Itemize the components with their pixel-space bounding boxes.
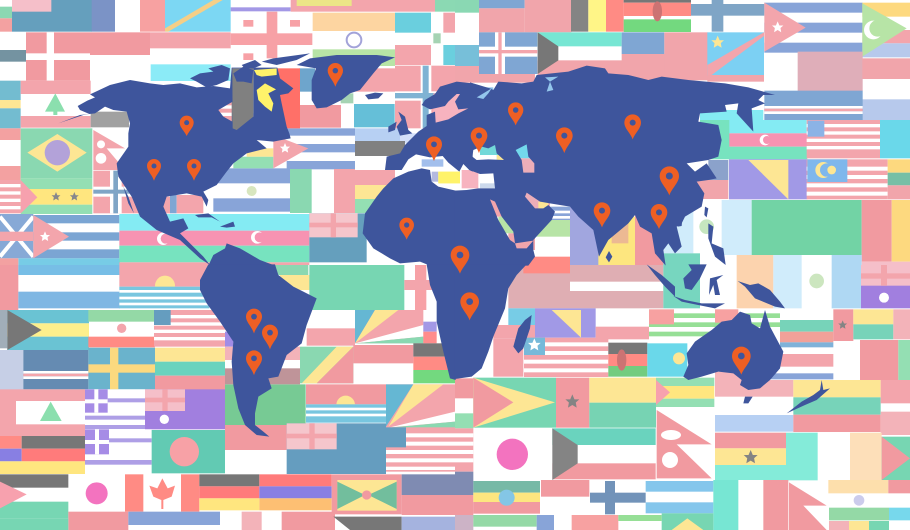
flags: Mediterranean and Baltic backdrop	[380, 93, 497, 193]
pin: Southeast Asia	[651, 204, 667, 229]
map: South America top	[208, 243, 275, 266]
flags: lower right area	[455, 265, 910, 530]
flags: upper left area	[0, 0, 455, 128]
flag: Brazil	[21, 128, 92, 178]
pin: Ukraine	[471, 127, 487, 153]
pin: China	[660, 166, 679, 195]
map: Tasmania	[743, 397, 753, 403]
map: Greenland	[297, 55, 395, 108]
map: New Zealand	[787, 380, 830, 413]
pin: Russia west	[508, 102, 523, 125]
pin: eastern USA	[187, 159, 201, 181]
map: Iceland	[365, 93, 383, 99]
pin: Australia	[732, 347, 751, 375]
world map	[58, 53, 830, 437]
flag: Sao Tome stripes	[0, 178, 92, 214]
map: Europe	[385, 82, 473, 172]
map: Australia	[683, 310, 783, 390]
pin: Argentina	[246, 350, 262, 375]
map: southern Africa east	[454, 264, 527, 379]
pin: Central Africa	[451, 246, 469, 274]
map: Asian islands	[606, 207, 726, 265]
flags: saturated patches seen through the map	[232, 68, 460, 183]
flag: Cuba	[273, 128, 355, 169]
flag: New Zealand	[309, 213, 367, 262]
flag: Azerbaijan	[119, 214, 309, 265]
pin: Brazil	[262, 325, 278, 349]
map: Madagascar	[513, 315, 532, 353]
map: Africa west	[363, 168, 456, 266]
location pins	[147, 63, 751, 375]
flags: upper middle and right	[455, 0, 910, 265]
map: Canadian arctic islands	[190, 53, 310, 87]
pin: Kazakhstan	[556, 127, 573, 153]
map: South America	[200, 264, 317, 437]
pin: West Africa	[399, 218, 414, 240]
flags: lower left area	[0, 265, 455, 530]
flag: El Salvador	[213, 168, 290, 212]
pin: Italy	[426, 136, 442, 161]
flag: Italy	[290, 169, 355, 213]
pin: India	[594, 202, 610, 227]
map: British Isles	[388, 112, 412, 136]
pin: Greenland	[328, 63, 343, 87]
map: Caribbean islands	[195, 213, 235, 228]
map: Indonesia and New Guinea	[647, 264, 785, 308]
pin: southern Africa	[460, 292, 479, 320]
pin: Siberia	[624, 114, 641, 139]
flag: Lebanon	[21, 81, 91, 128]
map: North America	[58, 68, 293, 265]
map: Eurasia and north-east Africa	[454, 66, 775, 266]
pin: western USA	[147, 159, 161, 181]
pin: Peru	[246, 309, 262, 333]
pin: Canada	[180, 116, 194, 136]
flag: Cuba with union jack	[0, 214, 120, 265]
map: Baja California	[123, 187, 134, 213]
flag: Norway	[395, 66, 455, 128]
map: south Africa	[427, 264, 456, 380]
